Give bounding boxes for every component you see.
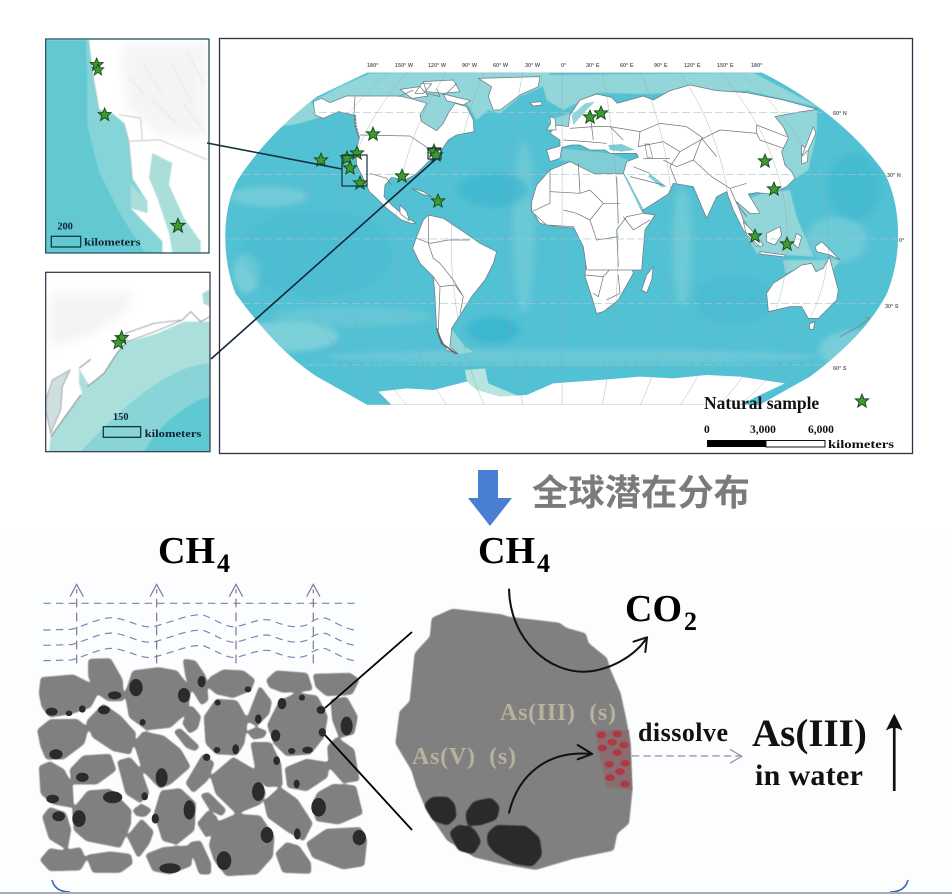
diagram: sediment column [38,584,366,875]
bottom bracket [52,880,908,892]
Madagascar [642,267,653,293]
scale label: kilometers [84,238,141,249]
graticule labels: 60° S [833,366,847,372]
ice shelf [465,368,520,403]
Arctic islands [400,80,471,105]
Arctic shelf [540,73,819,110]
scale bar: 6,000 [808,424,834,436]
inset drawing [46,39,209,253]
legend: natural sample: Natural sample [704,393,819,413]
As(III) particles [597,731,630,787]
arrow: As(V) to As(III) [509,745,592,813]
Timor shelf [783,260,840,273]
continent [313,96,474,223]
graticule labels: 30° S [885,304,899,310]
label: CO2: 2 [684,607,697,636]
landmass [547,85,817,247]
zoom line: upper [325,632,412,708]
Black Sea [608,144,635,152]
Okhotsk and East Asia shelf [773,109,817,180]
graticule labels: 0° [561,63,566,69]
scale bar [704,424,894,451]
Baltic Sea [572,102,595,125]
scale bar: kilometers [828,437,894,451]
Africa [532,200,655,313]
Persian Gulf [648,173,667,187]
graticule labels: 0° [899,238,904,244]
Caribbean islands [412,188,432,197]
SE Asia shelf [733,190,813,257]
Oceania and maritime Asia [743,222,869,337]
graticule labels: 180° [367,63,378,69]
arrow: increase [886,714,902,791]
red zone [595,730,632,790]
Caspian Sea [645,144,653,158]
ocean bathymetry [229,140,898,370]
inset locator boxes [342,148,441,186]
scale bar: 3,000 [750,424,776,436]
stars [90,58,185,232]
inset drawing [46,272,210,452]
graticule labels: 30° N [887,173,901,179]
graticule [220,72,907,405]
label: As(V) solid: As(V) (s) [412,744,516,770]
label: CH4 left: 4 [217,549,230,578]
graticule labels [367,63,904,372]
Antarctica [378,368,785,407]
Borneo [767,227,782,245]
sediment grains [38,659,366,875]
label: dissolve: dissolve [638,718,728,747]
ice sheet [378,375,785,407]
water dashes [43,603,360,661]
stars [112,331,128,349]
graticule labels: 150° W [395,63,414,69]
inset frame [46,272,210,452]
arrow: down [468,470,512,526]
rugged coast [355,115,359,138]
scale label: 200 [57,222,73,233]
panel: east coast inset [46,272,210,452]
scale label: 150 [113,412,128,423]
borders [354,83,457,185]
scale label: kilometers [145,429,201,440]
Java [760,252,785,257]
graticule labels: 120° E [684,63,701,69]
Mediterranean [558,148,628,174]
legend: natural sample [704,393,869,413]
scale label [103,412,201,440]
label: CH4 left: CH [158,530,215,572]
Iceland [530,102,542,106]
label: in water: in water [755,759,863,792]
scale bar: 0 [704,424,710,436]
North America and Greenland [280,72,550,223]
diagram: enlarged grain [396,589,902,869]
label: CH4 right: 4 [537,549,550,578]
Korea [802,145,808,164]
bottom edge [0,892,952,894]
graticule labels: 30° E [586,63,600,69]
panel: west coast inset [46,39,209,253]
label: As(III): As(III) [752,712,867,755]
North Africa [532,162,655,270]
Patagonian shelf [450,330,473,355]
leader line: east coast [211,159,436,359]
sample stars [314,106,794,250]
label: CO2: CO [625,588,682,630]
dark mineral inclusions [46,676,366,873]
borders [563,113,787,217]
Eurasia and north Africa [532,73,819,270]
rising gas arrows [70,584,320,663]
New Zealand [840,317,869,337]
world map drawing [220,60,910,420]
graticule labels: 150° E [717,63,734,69]
map frame [220,38,912,454]
heading: 全球潜在分布 [532,472,750,513]
graticule labels: 90° E [654,63,668,69]
South America and southern Africa [400,200,655,355]
arrow: CH4 to CO2 [509,589,647,672]
inset frame [46,39,209,253]
label: As(III) solid: As(III) (s) [500,700,616,726]
New Guinea [815,242,840,260]
British Isles [547,117,556,130]
graticule labels: 180° [751,63,762,69]
graticule labels: 60° W [493,63,509,69]
grain body [396,609,632,869]
leader line: west coast [207,143,342,169]
label: CH4 right: CH [478,530,535,572]
Central America [400,205,409,221]
Red Sea [623,174,643,210]
Sumatra [743,222,763,247]
Alaska shelf [280,100,322,127]
graticule labels: 30° W [525,63,541,69]
Australia [767,257,838,318]
panel: world map [220,38,912,454]
graticule labels: 120° W [428,63,447,69]
lower panel background [0,530,952,892]
arrow: dissolve [632,749,742,763]
zoom line: lower [325,735,412,830]
Greenland [478,77,540,110]
South America [413,215,497,354]
graticule labels: 90° W [462,63,478,69]
borders [417,215,470,330]
black As(V) minerals [426,798,540,865]
Arctic shelf [312,72,550,132]
North Sea shelf [548,113,570,126]
graticule labels: 60° E [620,63,634,69]
scale label [51,222,141,249]
Tasmania [809,322,815,329]
Sulawesi [793,233,802,248]
graticule labels: 60° N [833,111,847,117]
ocean [220,60,910,420]
southern Andes coast [437,328,457,354]
Japan [802,127,816,157]
